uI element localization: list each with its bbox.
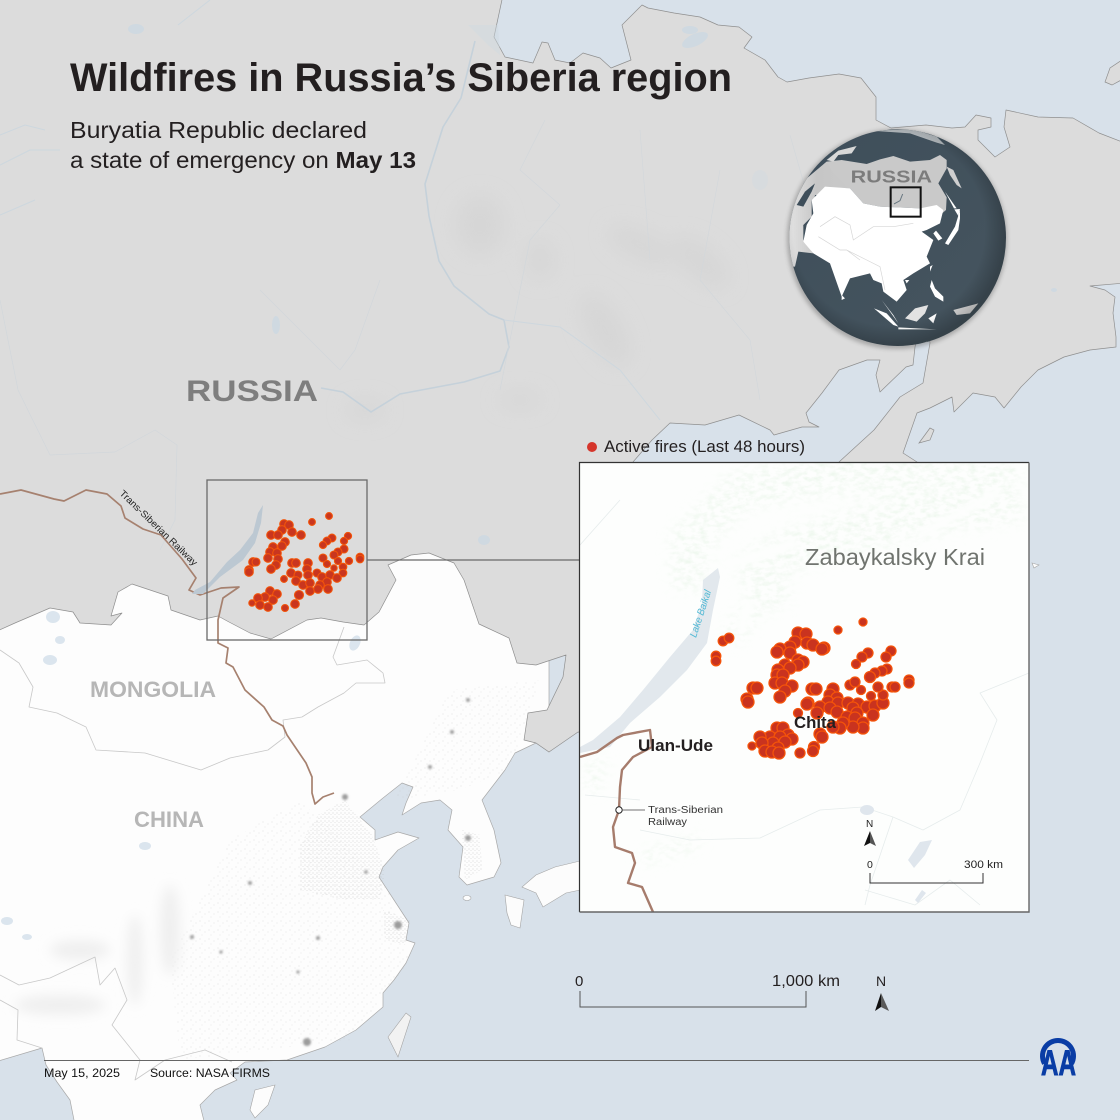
inset: railway callout: Trans-Siberian [648,805,723,816]
inset: railway [580,730,653,912]
main scale bar: 0 [575,973,583,990]
legend: active fires: Active fires (Last 48 hours) [604,438,805,456]
globe shadow [787,129,1007,349]
locator: Lake Baikal on main map [192,505,263,594]
inset: frame [580,462,1029,912]
subtitle: Buryatia Republic declared [70,117,367,143]
main north arrow [875,973,889,1011]
rivers: Russia [0,0,820,550]
inset: north arrow: N [866,819,873,830]
country label: Russia: RUSSIA [186,375,318,408]
inset: scale bar: 300 km [964,859,1003,871]
globe: far north land [821,155,947,213]
inset: Chita label: Chita [794,714,837,732]
terrain and population density: China [15,680,540,1060]
footer: source: Source: NASA FIRMS [150,1066,270,1080]
main scale bar: 1,000 km [772,973,840,990]
main north arrow: N [876,973,886,989]
logo: AA: AA [1041,1044,1076,1083]
inset: Lake Baikal label: Lake Baikal [688,588,714,639]
inset map panel [580,462,1029,912]
globe: shading [789,129,1006,346]
inset: north arrow [864,819,876,846]
inset: railway callout: Railway [648,817,687,828]
islands: Japan, Taiwan, Hainan [250,563,1039,1118]
globe: country borders [818,217,913,290]
terrain shading: Russia [345,195,737,420]
globe: Baikal mark [894,194,903,204]
inset: scale bar [867,859,1003,883]
globe: seas [796,184,816,226]
lakes and wetlands: Russia and north coast [128,24,1057,545]
subtitle [70,117,416,173]
lakes: China and Mongolia [1,611,363,940]
internal borders: Mongolia and southern Asia [0,627,385,1080]
inset: fires [711,618,914,759]
footer: date: May 15, 2025 [44,1066,120,1080]
main scale bar [575,973,840,1007]
locator box [207,480,367,640]
fires on main map [245,513,364,612]
subtitle: a state of emergency on May 13 [70,147,416,173]
land: Russia [0,0,1120,752]
inset: regional borders and rivers [580,500,1029,905]
inset: Ulan-Ude label: Ulan-Ude [638,737,713,755]
globe: locator box [891,187,921,217]
leader line to inset [367,559,580,561]
country label: China: CHINA [134,807,204,832]
inset: white valleys [725,490,1000,630]
railway: Trans-Siberian on main map [0,490,334,804]
label: Trans-Siberian Railway: Trans-Siberian Railway [117,488,200,569]
footer rule [44,1060,1029,1062]
country label: Mongolia: MONGOLIA [90,677,216,702]
globe: label: RUSSIA [851,167,932,187]
island: far-east Russia [919,428,934,443]
globe locator [783,129,1007,352]
inset: scale bar: 0 [867,859,873,871]
globe: Asia [803,187,943,302]
inset: Lake Baikal [580,568,720,753]
inset: railway callout [616,805,723,828]
inset: region label: Zabaykalsky Krai [805,544,985,570]
inset: small lakes [860,805,932,903]
title: Wildfires in Russia’s Siberia region [70,56,732,100]
globe: islands [842,192,960,329]
inset: vegetation texture [590,475,1020,860]
island: north-east land fragment [1105,58,1120,85]
land: China and Mongolia [0,500,549,1120]
globe: Scandinavia and Europe [783,162,850,267]
logo: AA [1041,1040,1076,1083]
